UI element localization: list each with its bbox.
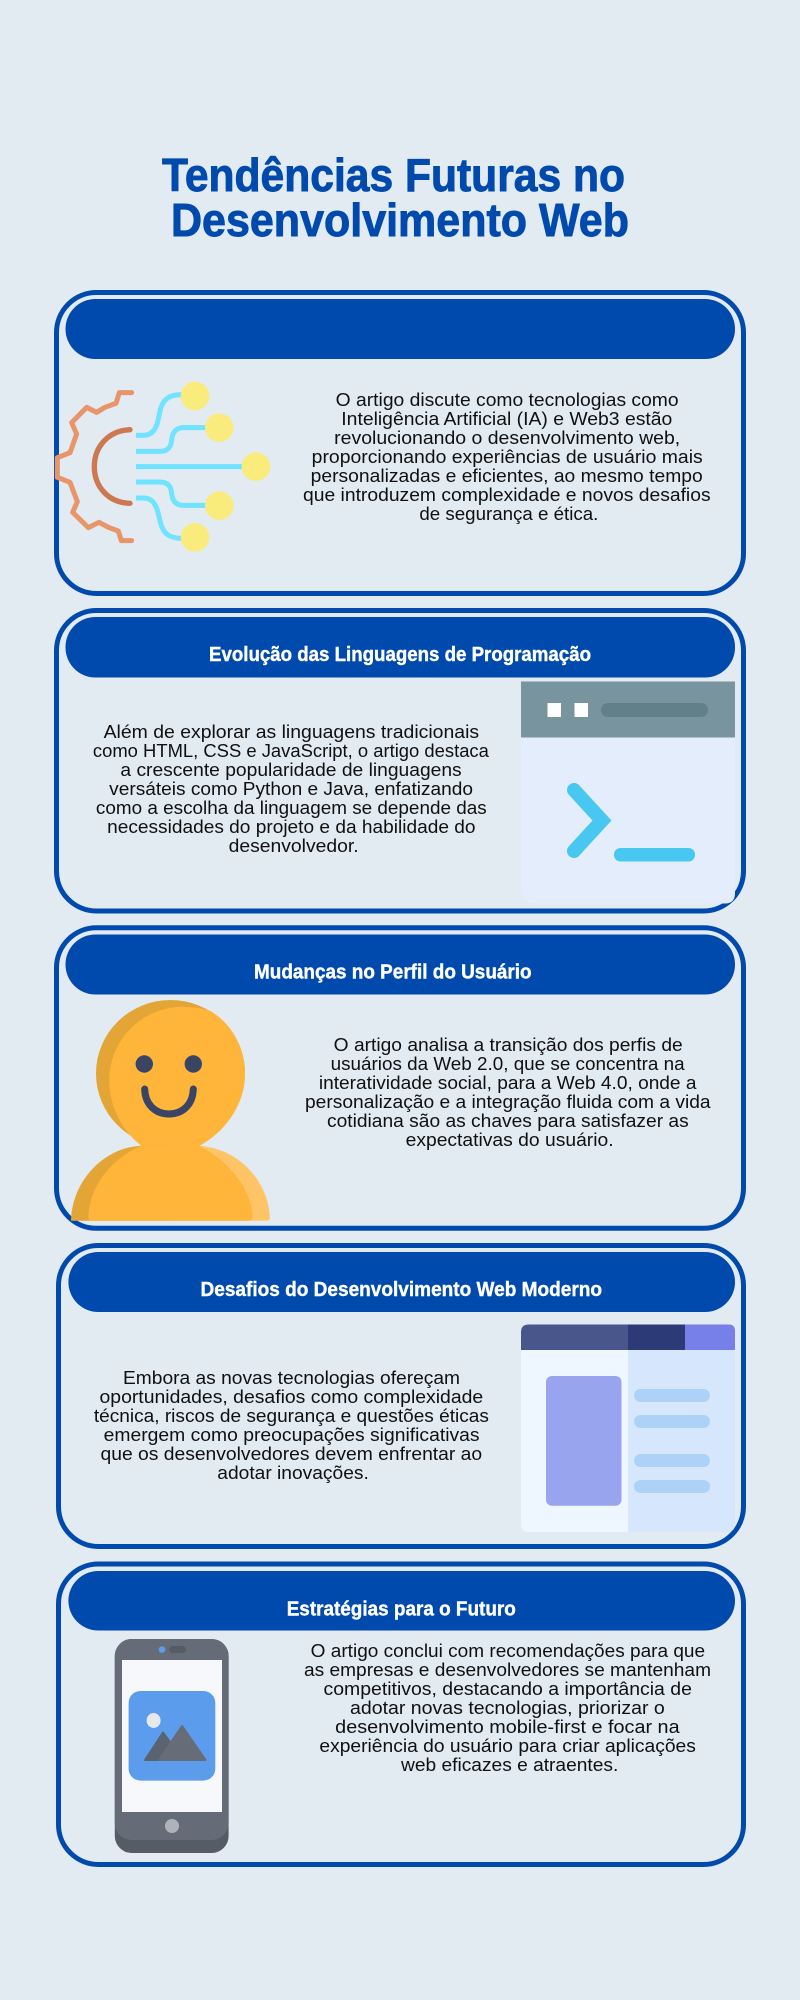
heading bar: programming languages bbox=[66, 617, 735, 678]
heading bar: modern challenges bbox=[68, 1252, 735, 1312]
text: introduction: que introduzem complexidade e novos desafios bbox=[303, 485, 711, 505]
text: programming languages: desenvolvedor. bbox=[229, 836, 359, 856]
panel: programming languages bbox=[56, 610, 744, 911]
text: modern challenges: Embora as novas tecnologias ofereçam bbox=[123, 1368, 460, 1388]
heading bar: future strategies: Estratégias para o Futuro bbox=[287, 1599, 516, 1621]
text: introduction bbox=[303, 390, 711, 524]
text: user profile: interatividade social, para a Web 4.0, onde a bbox=[319, 1073, 698, 1093]
heading bar: modern challenges: Desafios do Desenvolvimento Web Moderno bbox=[200, 1279, 602, 1301]
text: introduction: de segurança e ética. bbox=[419, 504, 598, 524]
text: user profile: O artigo analisa a transição dos perfis de bbox=[334, 1035, 683, 1055]
text: introduction: proporcionando experiências de usuário mais bbox=[312, 447, 703, 467]
text: programming languages: a crescente popularidade de linguagens bbox=[120, 760, 462, 780]
text: programming languages: como HTML, CSS e JavaScript, o artigo destaca bbox=[93, 741, 490, 761]
text: modern challenges: emergem como preocupações significativas bbox=[104, 1425, 480, 1445]
icon: web page layout bbox=[521, 1324, 735, 1532]
heading bar: future strategies bbox=[68, 1571, 735, 1630]
text: programming languages: necessidades do projeto e da habilidade do bbox=[107, 817, 475, 837]
panel: future strategies bbox=[58, 1564, 744, 1864]
text: introduction: Inteligência Artificial (IA) e Web3 estão bbox=[341, 409, 672, 429]
icon: smiling user bbox=[71, 1000, 270, 1221]
text: user profile: personalização e a integração fluida com a vida bbox=[305, 1092, 712, 1112]
title bbox=[162, 149, 629, 246]
text: programming languages: versáteis como Python e Java, enfatizando bbox=[109, 779, 473, 799]
text: introduction: personalizadas e eficientes, ao mesmo tempo bbox=[311, 466, 703, 486]
text: future strategies: desenvolvimento mobile-first e focar na bbox=[335, 1717, 681, 1737]
icon: terminal window bbox=[521, 682, 735, 904]
text: user profile: cotidiana são as chaves para satisfazer as bbox=[327, 1111, 689, 1131]
text: user profile bbox=[305, 1035, 712, 1150]
text: programming languages: como a escolha da linguagem se depende das bbox=[96, 798, 487, 818]
text: modern challenges bbox=[94, 1368, 489, 1483]
text: user profile: expectativas do usuário. bbox=[406, 1130, 614, 1150]
text: modern challenges: oportunidades, desafios como complexidade bbox=[100, 1387, 483, 1407]
text: future strategies: O artigo conclui com recomendações para que bbox=[311, 1641, 705, 1661]
text: future strategies: experiência do usuário para criar aplicações bbox=[319, 1736, 696, 1756]
text: modern challenges: adotar inovações. bbox=[217, 1463, 369, 1483]
panel: modern challenges bbox=[58, 1246, 744, 1546]
panel: introduction bbox=[56, 292, 744, 594]
text: introduction: revolucionando o desenvolvimento web, bbox=[334, 428, 680, 448]
icon: gear with network connections bbox=[57, 382, 270, 552]
text: introduction: O artigo discute como tecnologias como bbox=[336, 390, 679, 410]
text: future strategies: as empresas e desenvolvedores se mantenham bbox=[304, 1660, 711, 1680]
heading bar: programming languages: Evolução das Linguagens de Programação bbox=[209, 644, 591, 666]
text: modern challenges: que os desenvolvedores devem enfrentar ao bbox=[100, 1444, 482, 1464]
icon: smartphone with image bbox=[115, 1639, 229, 1853]
empty heading bar bbox=[66, 299, 735, 359]
text: user profile: usuários da Web 2.0, que se concentra na bbox=[331, 1054, 686, 1074]
panel: user profile bbox=[56, 928, 744, 1228]
text: programming languages bbox=[93, 722, 490, 856]
title: Tendências Futuras no bbox=[162, 149, 625, 201]
text: future strategies: web eficazes e atraentes. bbox=[400, 1755, 618, 1775]
text: modern challenges: técnica, riscos de segurança e questões éticas bbox=[94, 1406, 489, 1426]
text: future strategies bbox=[304, 1641, 711, 1775]
heading bar: user profile bbox=[66, 934, 735, 994]
text: future strategies: adotar novas tecnologias, priorizar o bbox=[350, 1698, 665, 1718]
text: programming languages: Além de explorar as linguagens tradicionais bbox=[104, 722, 479, 742]
title: Desenvolvimento Web bbox=[171, 194, 629, 246]
text: future strategies: competitivos, destacando a importância de bbox=[324, 1679, 692, 1699]
heading bar: user profile: Mudanças no Perfil do Usuário bbox=[254, 961, 532, 983]
